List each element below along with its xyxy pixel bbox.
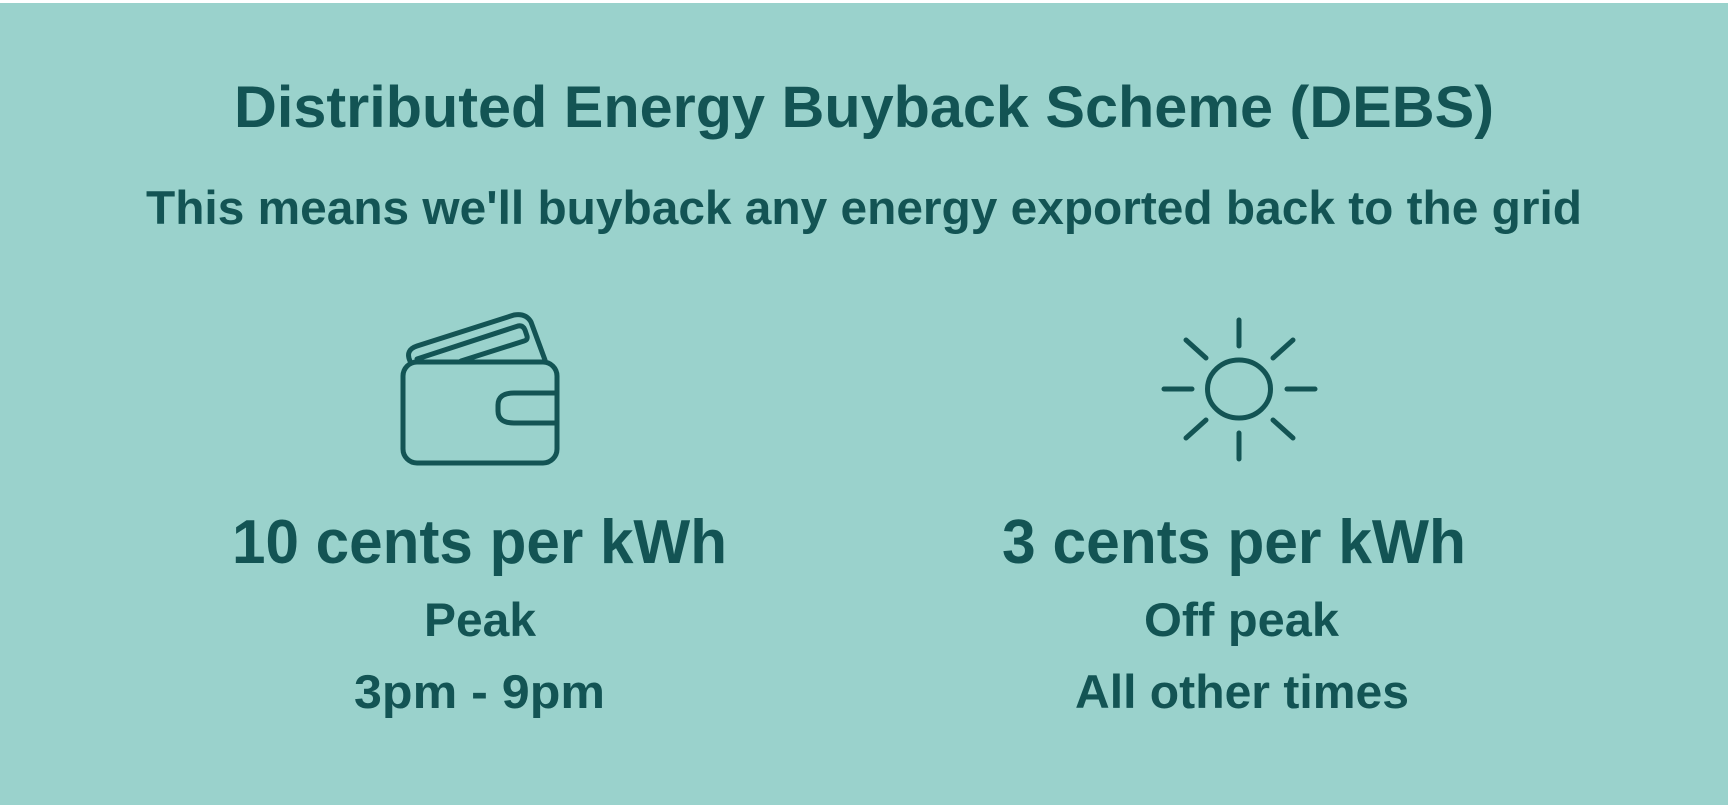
title: Distributed Energy Buyback Scheme (DEBS) <box>234 75 1494 140</box>
off peak rate value: 3 cents per kWh <box>1002 508 1466 577</box>
icon: sun <box>1164 320 1315 459</box>
panel: peak rate <box>232 315 727 718</box>
subtitle: This means we'll buyback any energy exported back to the grid <box>146 181 1582 234</box>
peak rate value: 10 cents per kWh <box>232 508 727 577</box>
peak hours: 3pm - 9pm <box>354 665 605 718</box>
peak label: Peak <box>424 593 537 646</box>
off peak label: Off peak <box>1144 593 1340 646</box>
panel: off peak rate <box>1002 320 1466 718</box>
off peak hours: All other times <box>1075 665 1409 718</box>
icon: wallet <box>403 315 557 463</box>
